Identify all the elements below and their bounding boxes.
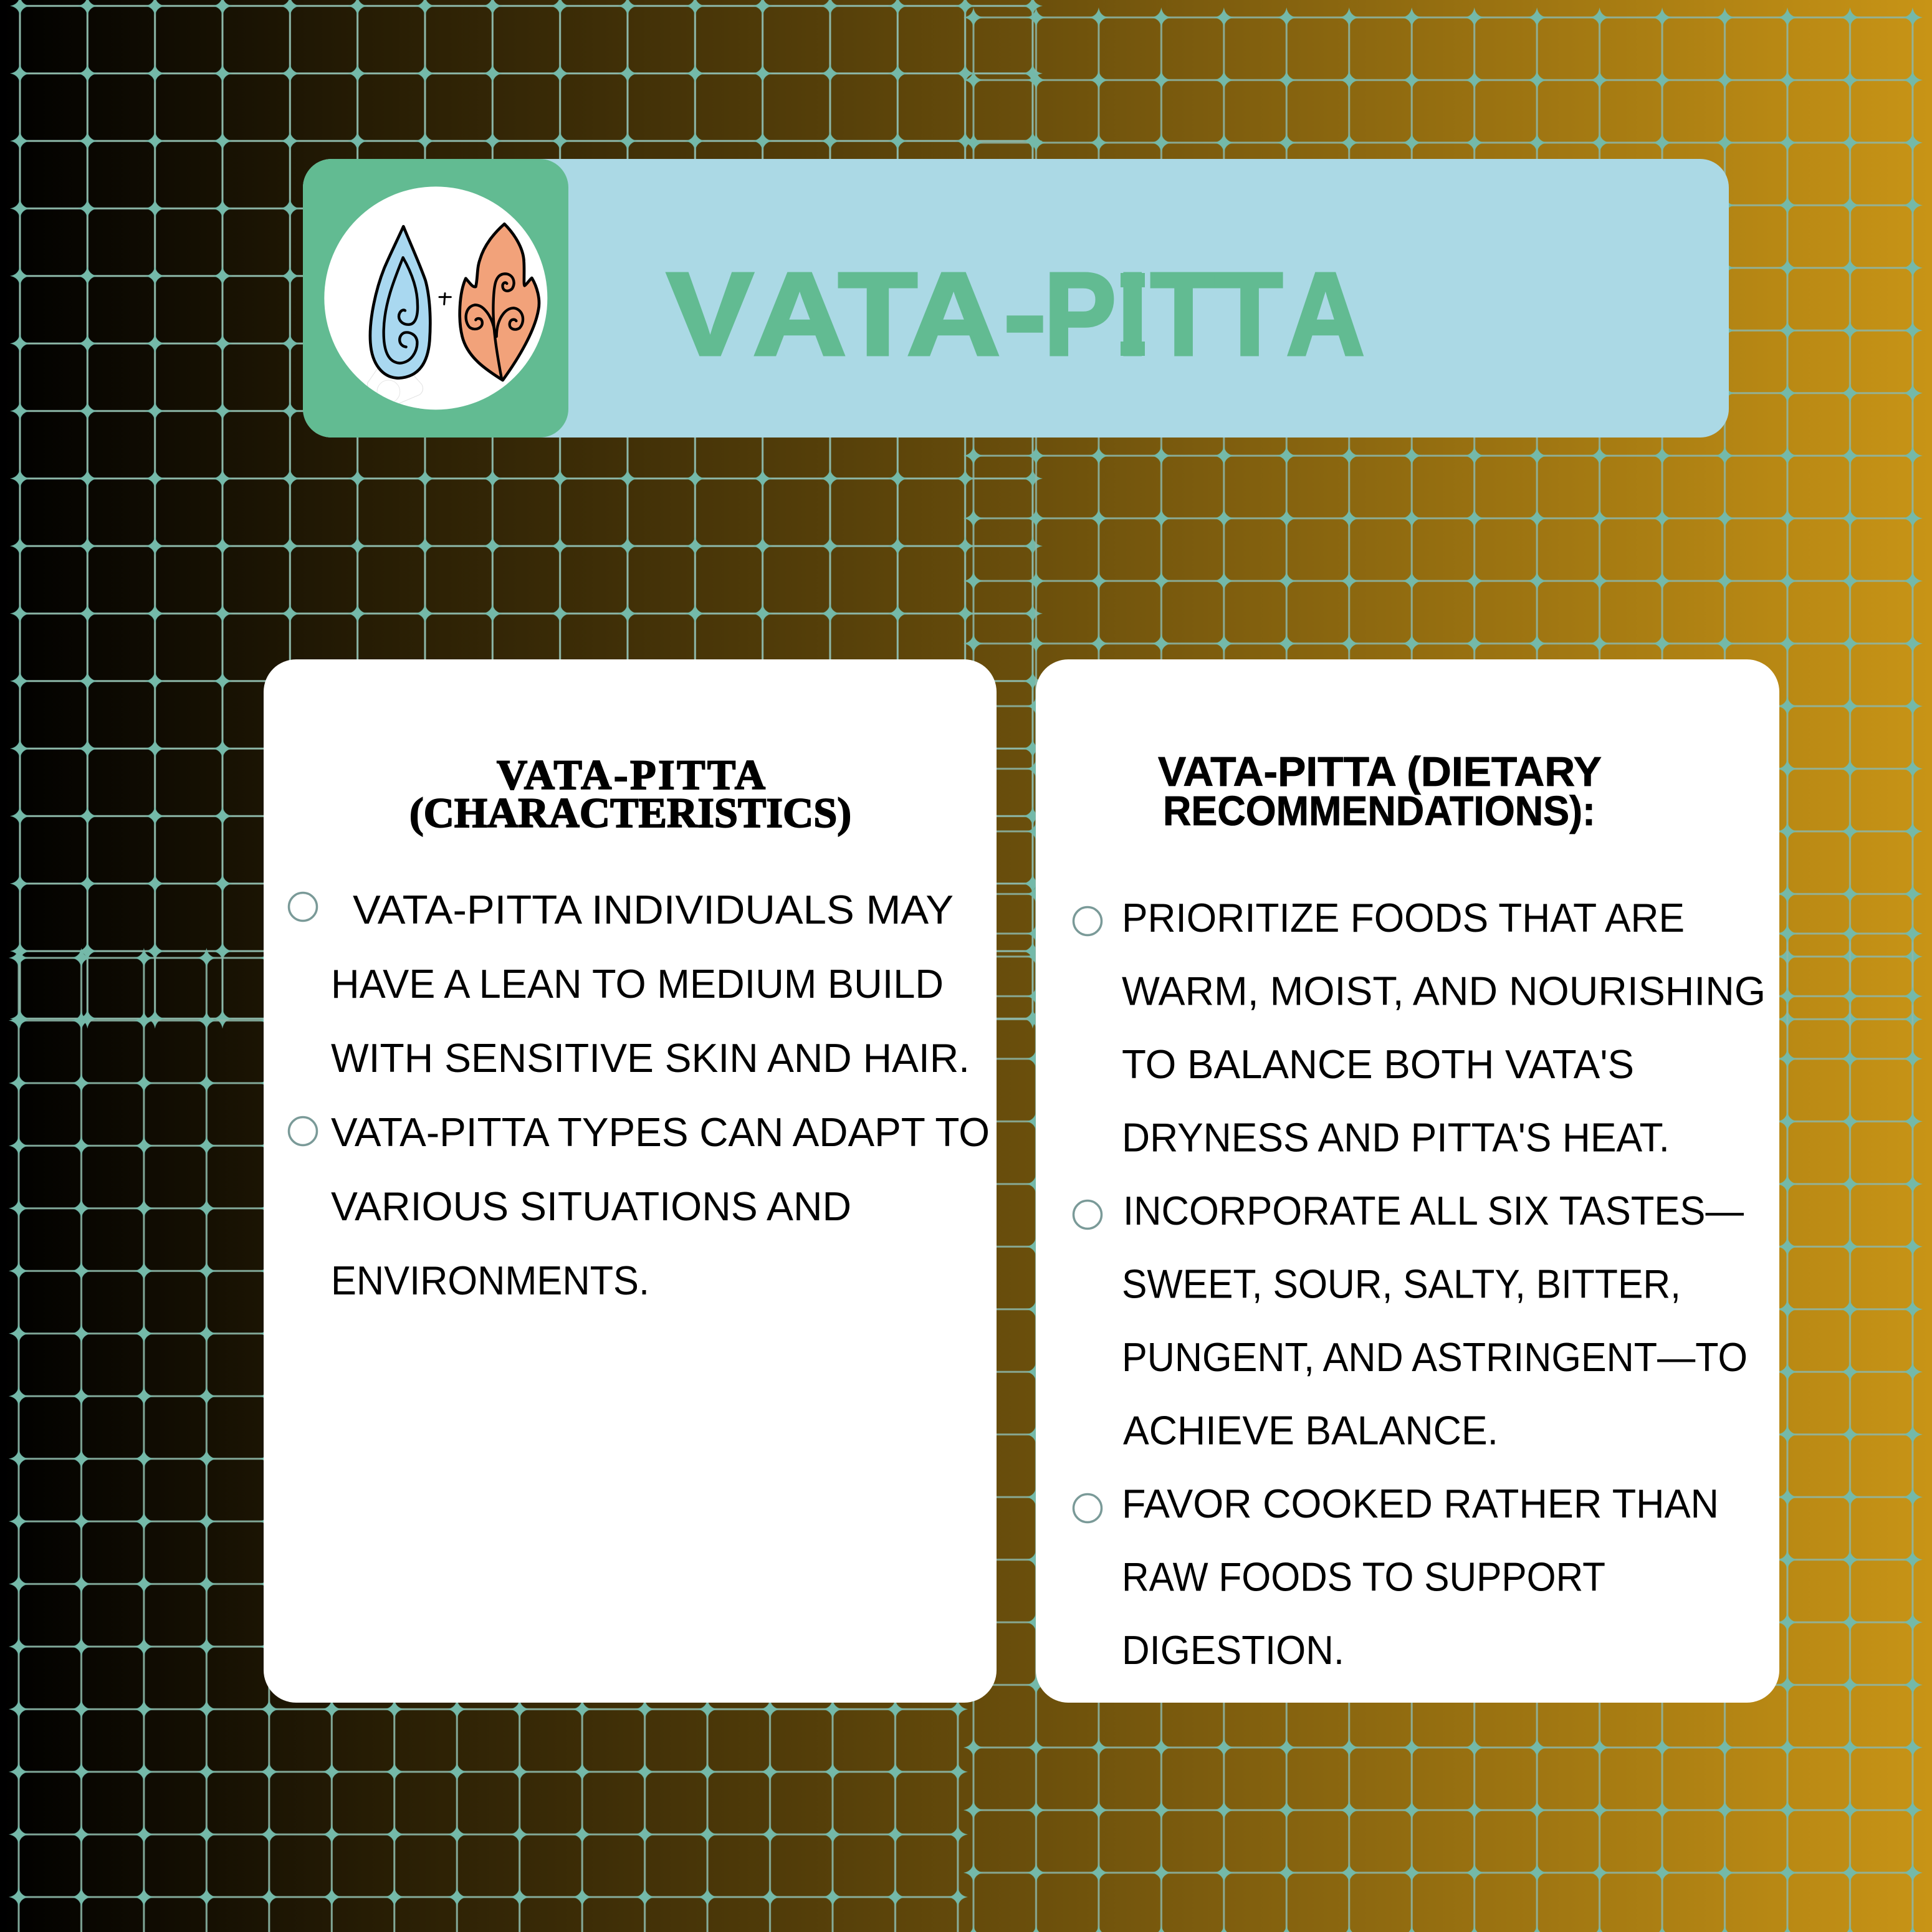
bullet item: six tastes: PUNGENT, AND ASTRINGENT—TO: [1122, 1334, 1748, 1380]
title: VATA-: [667, 249, 1046, 380]
heading: characteristics: (CHARACTERISTICS): [409, 789, 851, 836]
bullet item: six tastes: ACHIEVE BALANCE.: [1123, 1407, 1498, 1453]
banner background: [303, 159, 1729, 438]
bullet item: warm moist foods: TO BALANCE BOTH VATA'S: [1122, 1041, 1634, 1087]
bullet item: warm moist foods: WARM, MOIST, AND NOURISHING: [1122, 968, 1766, 1013]
bullet item: warm moist foods: PRIORITIZE FOODS THAT ARE: [1122, 895, 1685, 940]
panel: dietary recommendations: [1036, 659, 1779, 1703]
bullet item: six tastes: [1073, 1188, 1748, 1453]
bullet item: adaptability: [289, 1109, 990, 1303]
heading: characteristics: [409, 751, 851, 836]
card background: [1036, 659, 1779, 1703]
header banner: [303, 159, 1729, 438]
icon panel: [303, 159, 568, 438]
bullet item: cooked foods: RAW FOODS TO SUPPORT: [1122, 1554, 1605, 1599]
bullet item: cooked foods: DIGESTION.: [1122, 1627, 1344, 1673]
bullet item: cooked foods: [1073, 1481, 1719, 1673]
heading: dietary recommendations: RECOMMENDATIONS):: [1163, 788, 1595, 834]
bullet item: adaptability: VATA-PITTA TYPES CAN ADAPT TO: [331, 1109, 990, 1155]
bullet item: adaptability: VARIOUS SITUATIONS AND: [331, 1184, 851, 1229]
title: PITTA: [1044, 249, 1365, 380]
bullet item: warm moist foods: [1073, 895, 1766, 1160]
bullet item: build and skin: VATA-PITTA INDIVIDUALS MAY: [353, 887, 954, 932]
bullet item: six tastes: INCORPORATE ALL SIX TASTES—: [1123, 1188, 1744, 1233]
bullet item: cooked foods: FAVOR COOKED RATHER THAN: [1122, 1481, 1719, 1526]
heading: characteristics: VATA-PITTA: [497, 751, 765, 798]
bullet item: adaptability: ENVIRONMENTS.: [331, 1258, 649, 1303]
bullet item: build and skin: WITH SENSITIVE SKIN AND HAIR.: [331, 1035, 970, 1081]
panel: characteristics: [264, 659, 997, 1703]
icon: water drop plus fire leaf: [324, 186, 547, 409]
bullet item: warm moist foods: DRYNESS AND PITTA'S HEAT.: [1122, 1114, 1670, 1160]
card background: [264, 659, 997, 1703]
bullet item: six tastes: SWEET, SOUR, SALTY, BITTER,: [1122, 1261, 1681, 1306]
bullet item: build and skin: HAVE A LEAN TO MEDIUM BUILD: [331, 961, 944, 1007]
heading: dietary recommendations: [1158, 748, 1602, 834]
title: [667, 249, 1365, 380]
heading: dietary recommendations: VATA-PITTA (DIETARY: [1158, 748, 1602, 795]
bullet item: build and skin: [289, 887, 970, 1081]
